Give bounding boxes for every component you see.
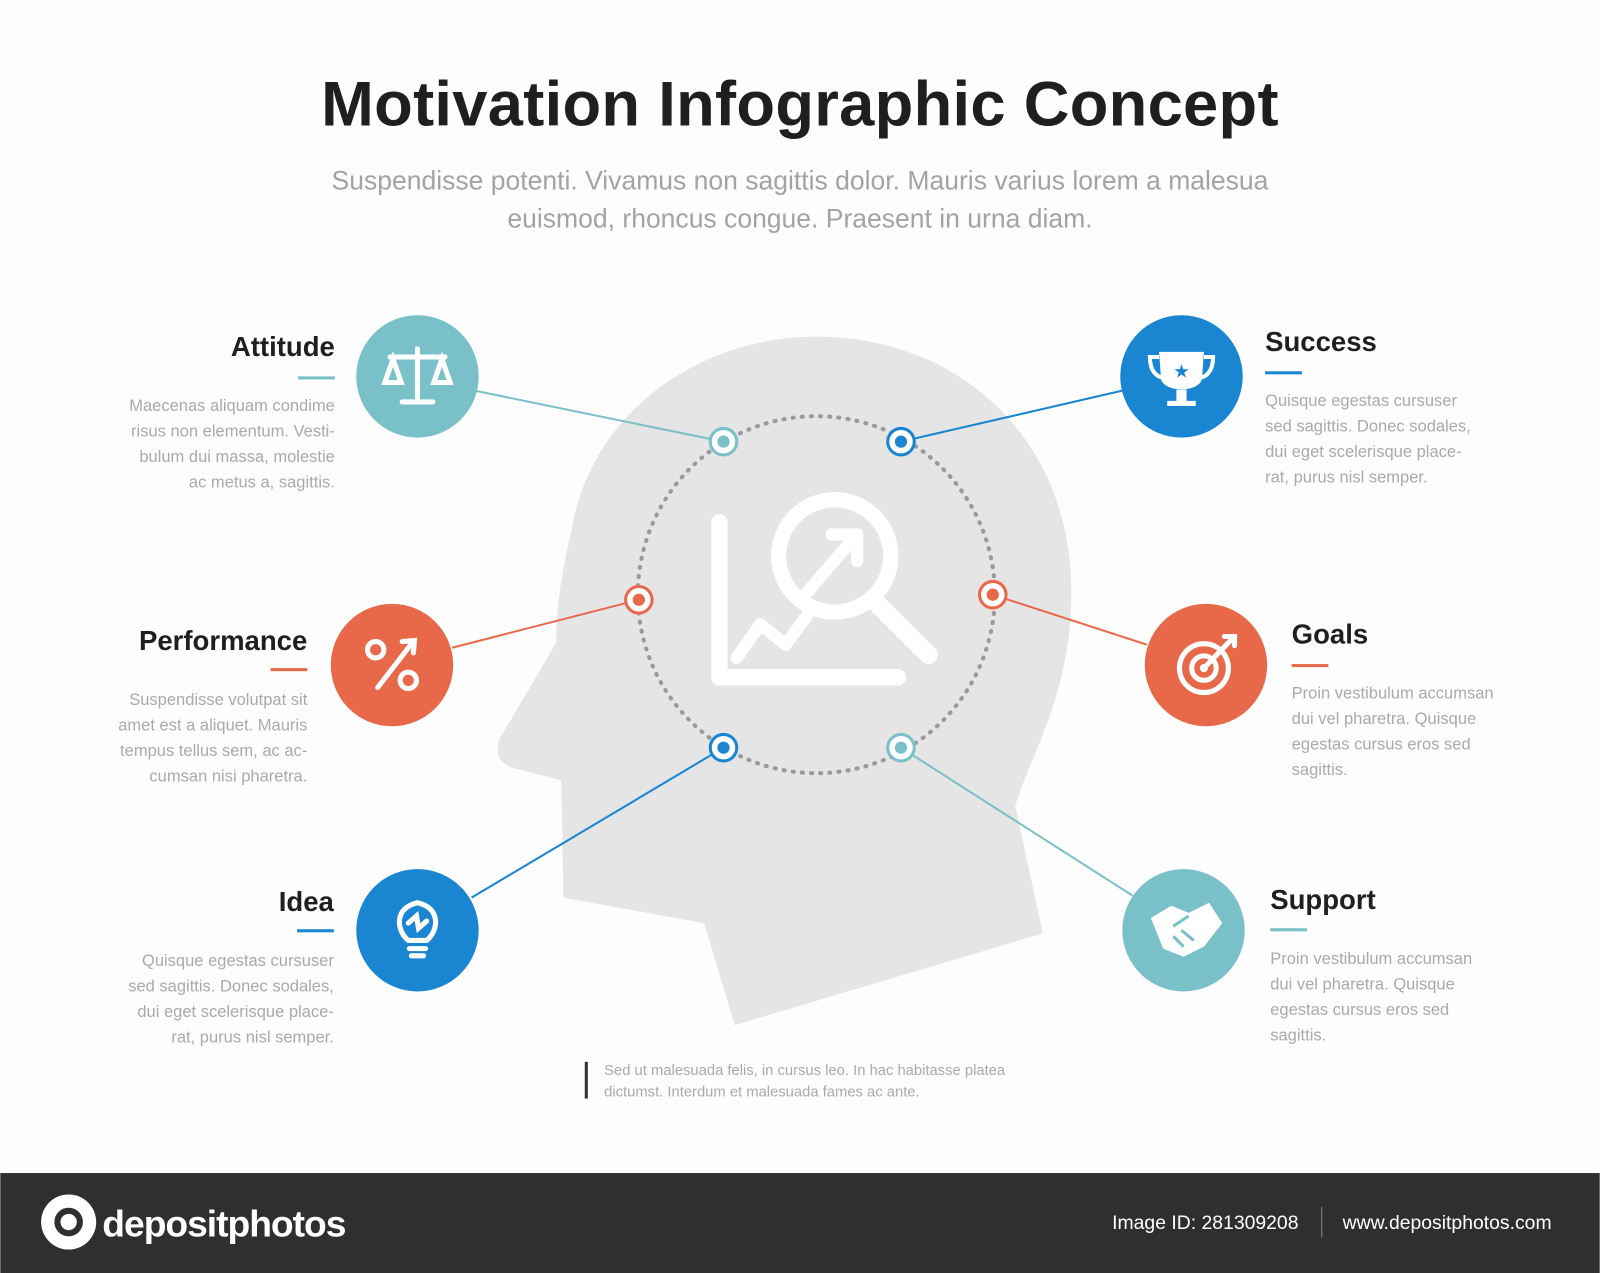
text: idea: dui eget scelerisque place- [137,1002,334,1021]
footer bar: depositphotos [102,1202,346,1244]
text: success: Success [1265,326,1377,357]
text: idea: Idea [279,886,335,917]
text: success [1265,326,1471,486]
connector lines [452,391,1147,898]
text: performance: cumsan nisi pharetra. [149,766,307,785]
text: support: Proin vestibulum accumsan [1270,949,1472,968]
text: idea: Quisque egestas cursuser [142,951,334,970]
text: goals: Proin vestibulum accumsan [1292,684,1494,703]
bottom note: Sed ut malesuada felis, in cursus leo. In hac habitasse platea [604,1063,1006,1079]
icon: chart with magnifier [719,500,929,677]
text: success: dui eget scelerisque place- [1265,442,1462,461]
text: performance: Performance [139,625,307,656]
text: idea: sed sagittis. Donec sodales, [128,976,334,995]
text: performance: tempus tellus sem, ac ac- [120,741,307,760]
text: support: egestas cursus eros sed [1270,1000,1449,1019]
text: performance [118,625,308,785]
text: support: dui vel pharetra. Quisque [1270,974,1455,993]
text: attitude: Maecenas aliquam condime [129,396,335,415]
subtitle: Suspendisse potenti. Vivamus non sagittis dolor. Mauris varius lorem a malesua [332,166,1269,196]
text: goals: sagittis. [1292,760,1348,779]
bottom note [585,1062,1006,1101]
text: performance: amet est a aliquet. Mauris [118,715,307,734]
title: Motivation Infographic Concept [321,69,1279,139]
icon: bulb [356,869,479,991]
text: support: sagittis. [1270,1025,1326,1044]
head silhouette [498,337,1071,1025]
text: goals: Goals [1292,619,1368,650]
text: attitude [129,331,335,492]
text: success: Quisque egestas cursuser [1265,391,1457,410]
text: attitude: risus non elementum. Vesti- [131,422,335,441]
icon: handshake [1122,869,1245,991]
icon: attitude scale [356,315,479,438]
text: attitude: bulum dui massa, molestie [139,447,335,466]
footer bar [0,1173,1600,1273]
text: support [1270,884,1472,1044]
text: idea: rat, purus nisl semper. [171,1027,334,1046]
text: success: sed sagittis. Donec sodales, [1265,416,1471,435]
subtitle: euismod, rhoncus congue. Praesent in urna diam. [507,203,1093,233]
text: success: rat, purus nisl semper. [1265,467,1428,486]
subtitle [332,166,1269,233]
icon: trophy [1120,315,1243,438]
dotted circle [638,416,995,773]
text: attitude: ac metus a, sagittis. [189,473,335,492]
icon: trophy: ★ [1173,360,1190,381]
nodes [626,428,1006,761]
footer bar: www.depositphotos.com [1342,1212,1552,1234]
bottom note: dictumst. Interdum et malesuada fames ac ante. [604,1085,920,1101]
text: goals [1292,619,1494,779]
text: performance: Suspendisse volutpat sit [129,690,308,709]
icon: target [1145,604,1267,726]
text: attitude: Attitude [231,331,335,362]
text: support: Support [1270,884,1376,915]
text: goals: dui vel pharetra. Quisque [1292,709,1476,728]
icon: percent [331,604,453,726]
text: goals: egestas cursus eros sed [1292,735,1471,754]
footer bar: Image ID: 281309208 [1112,1212,1298,1234]
text: idea [128,886,335,1046]
